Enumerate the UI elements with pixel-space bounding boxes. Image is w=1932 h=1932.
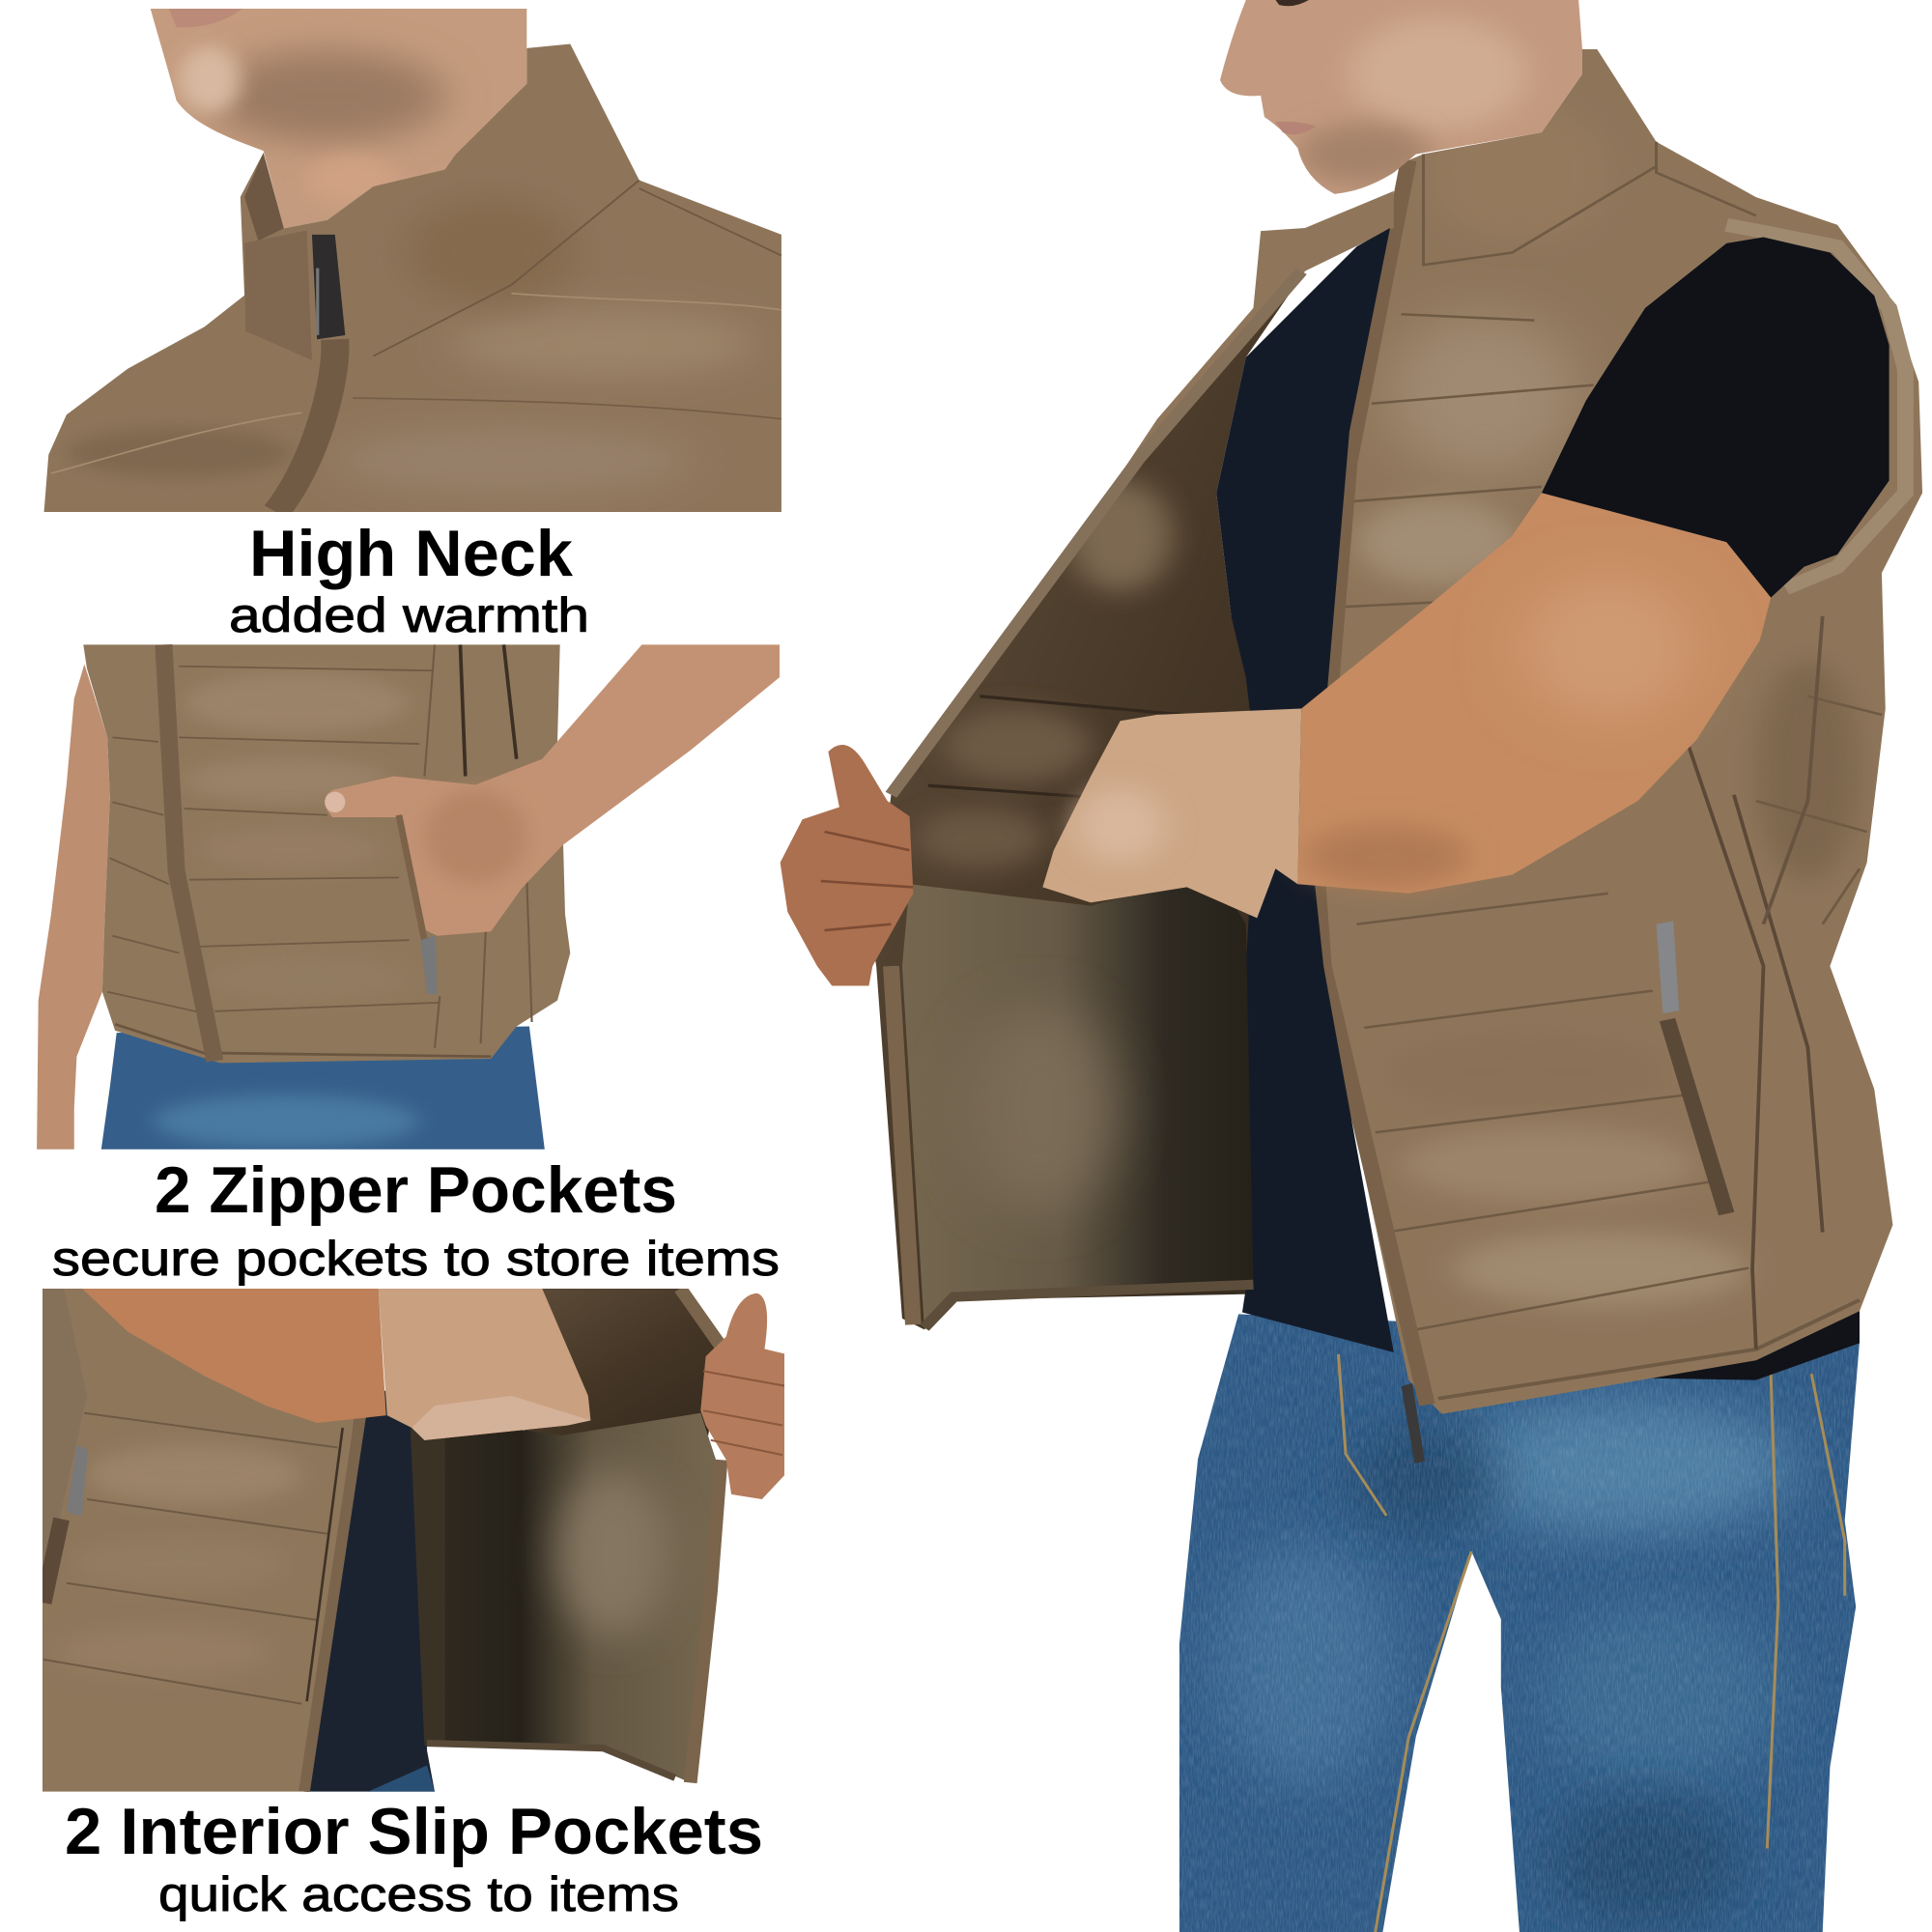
front zipper bbox=[304, 1415, 360, 1792]
heading: 2 interior slip pockets: 2 Interior Slip Pockets bbox=[65, 1795, 763, 1868]
gripping hand bbox=[781, 745, 913, 985]
center zipper bbox=[163, 644, 214, 1061]
panel: interior slip pockets photo bbox=[43, 1289, 785, 1792]
forearm and hand bbox=[1042, 708, 1301, 918]
lower zipper pull bbox=[1402, 1383, 1425, 1463]
navy tee bbox=[1216, 228, 1394, 1352]
jeans sliver bbox=[368, 1766, 435, 1792]
chin and neck skin bbox=[151, 9, 526, 228]
open edge zipper bbox=[680, 1289, 721, 1782]
jeans bbox=[1179, 1314, 1860, 1932]
open zipper edge bbox=[891, 271, 1301, 795]
pocket zipper and pull bbox=[399, 815, 438, 994]
black tee hem bbox=[1512, 1306, 1860, 1380]
navy tee bbox=[304, 1391, 435, 1792]
panel: main model photo bbox=[781, 0, 1922, 1932]
vest torso bbox=[1313, 49, 1922, 1414]
torso zipper bbox=[1316, 160, 1427, 1405]
interior shell bbox=[410, 1428, 445, 1747]
vest front panel bbox=[43, 1289, 388, 1792]
gripping hand bbox=[700, 1293, 785, 1499]
open vest flap outer shell bbox=[1121, 191, 1394, 474]
subheading: quick access to items: quick access to items bbox=[158, 1867, 679, 1921]
left arm bbox=[37, 664, 110, 1150]
pocket zipper bbox=[1657, 922, 1726, 1213]
black sleeve bbox=[1542, 238, 1889, 598]
armhole binding bbox=[1726, 225, 1905, 588]
bent arm bbox=[1297, 493, 1771, 894]
head bbox=[1220, 0, 1582, 194]
forearm bbox=[82, 1289, 590, 1440]
vest collar and chest bbox=[44, 44, 781, 512]
jeans bbox=[101, 1026, 545, 1150]
panel: zipper pockets photo bbox=[37, 644, 780, 1150]
open vest flap lining bbox=[872, 271, 1305, 1329]
slip pocket bbox=[427, 1413, 716, 1782]
quilted vest front bbox=[83, 644, 570, 1063]
upper lining bbox=[524, 1289, 715, 1435]
heading: 2 zipper pockets: 2 Zipper Pockets bbox=[155, 1153, 677, 1227]
neck zipper bbox=[276, 235, 345, 512]
heading: high neck: High Neck bbox=[249, 517, 573, 590]
interior pocket bbox=[891, 875, 1253, 1329]
panel: high neck photo bbox=[44, 9, 781, 512]
subheading: added warmth: added warmth bbox=[229, 588, 589, 642]
hand in pocket bbox=[325, 644, 780, 936]
subheading: secure pockets to store items: secure pockets to store items bbox=[52, 1232, 780, 1286]
